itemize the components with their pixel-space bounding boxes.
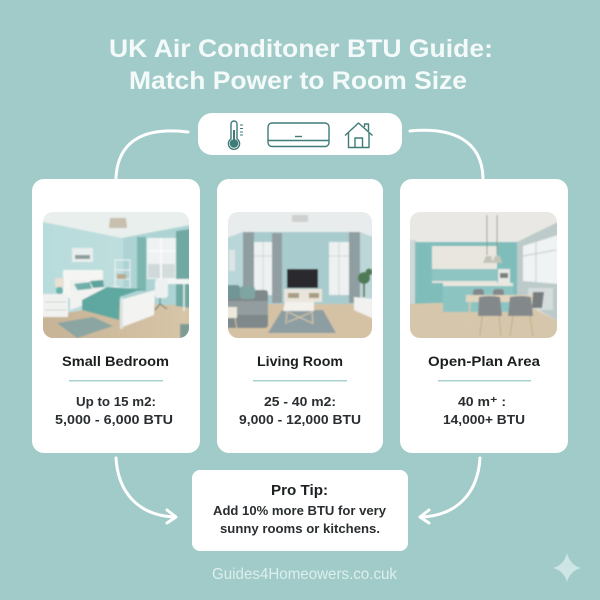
title: Match Power to Room Size	[129, 67, 467, 95]
sizing text	[443, 394, 525, 427]
panel: open-plan area	[400, 179, 568, 453]
callout: pro tip	[192, 470, 408, 551]
panel: living room	[217, 179, 383, 453]
callout: pro tip: Pro Tip:	[271, 482, 328, 499]
heading: Living Room	[257, 353, 343, 369]
panel: small bedroom	[32, 179, 200, 453]
heading: Open-Plan Area	[428, 353, 540, 369]
icon: thermometer	[228, 121, 243, 149]
callout: pro tip: Add 10% more BTU for very	[213, 503, 387, 518]
sizing text: 14,000+ BTU	[443, 412, 525, 427]
arrow: first card to pro tip	[116, 458, 176, 523]
footer website: Guides4Homeowers.co.cuk	[212, 566, 398, 583]
arrow: third card to pro tip	[420, 458, 480, 523]
connector: icon bar to third card	[410, 130, 483, 178]
sizing text	[239, 394, 361, 427]
photo: open-plan kitchen	[408, 208, 560, 342]
title	[109, 35, 493, 95]
sizing text	[55, 394, 173, 427]
sizing text: 25 - 40 m2:	[264, 394, 336, 409]
icon: house	[345, 123, 372, 148]
sizing text: 5,000 - 6,000 BTU	[55, 412, 173, 427]
connector: icon bar to first card	[116, 131, 188, 178]
icon: air conditioner	[268, 123, 329, 146]
icon: sparkle	[553, 553, 581, 582]
heading: Small Bedroom	[62, 353, 169, 369]
callout: pro tip: sunny rooms or kitchens.	[220, 521, 380, 536]
photo: bedroom	[43, 212, 189, 338]
sizing text: 40 m⁺ :	[458, 394, 506, 409]
photo: living room	[226, 208, 376, 342]
title: UK Air Conditoner BTU Guide:	[109, 35, 493, 63]
sizing text: 9,000 - 12,000 BTU	[239, 412, 361, 427]
sizing text: Up to 15 m2:	[76, 394, 156, 409]
icon bar	[198, 113, 402, 155]
